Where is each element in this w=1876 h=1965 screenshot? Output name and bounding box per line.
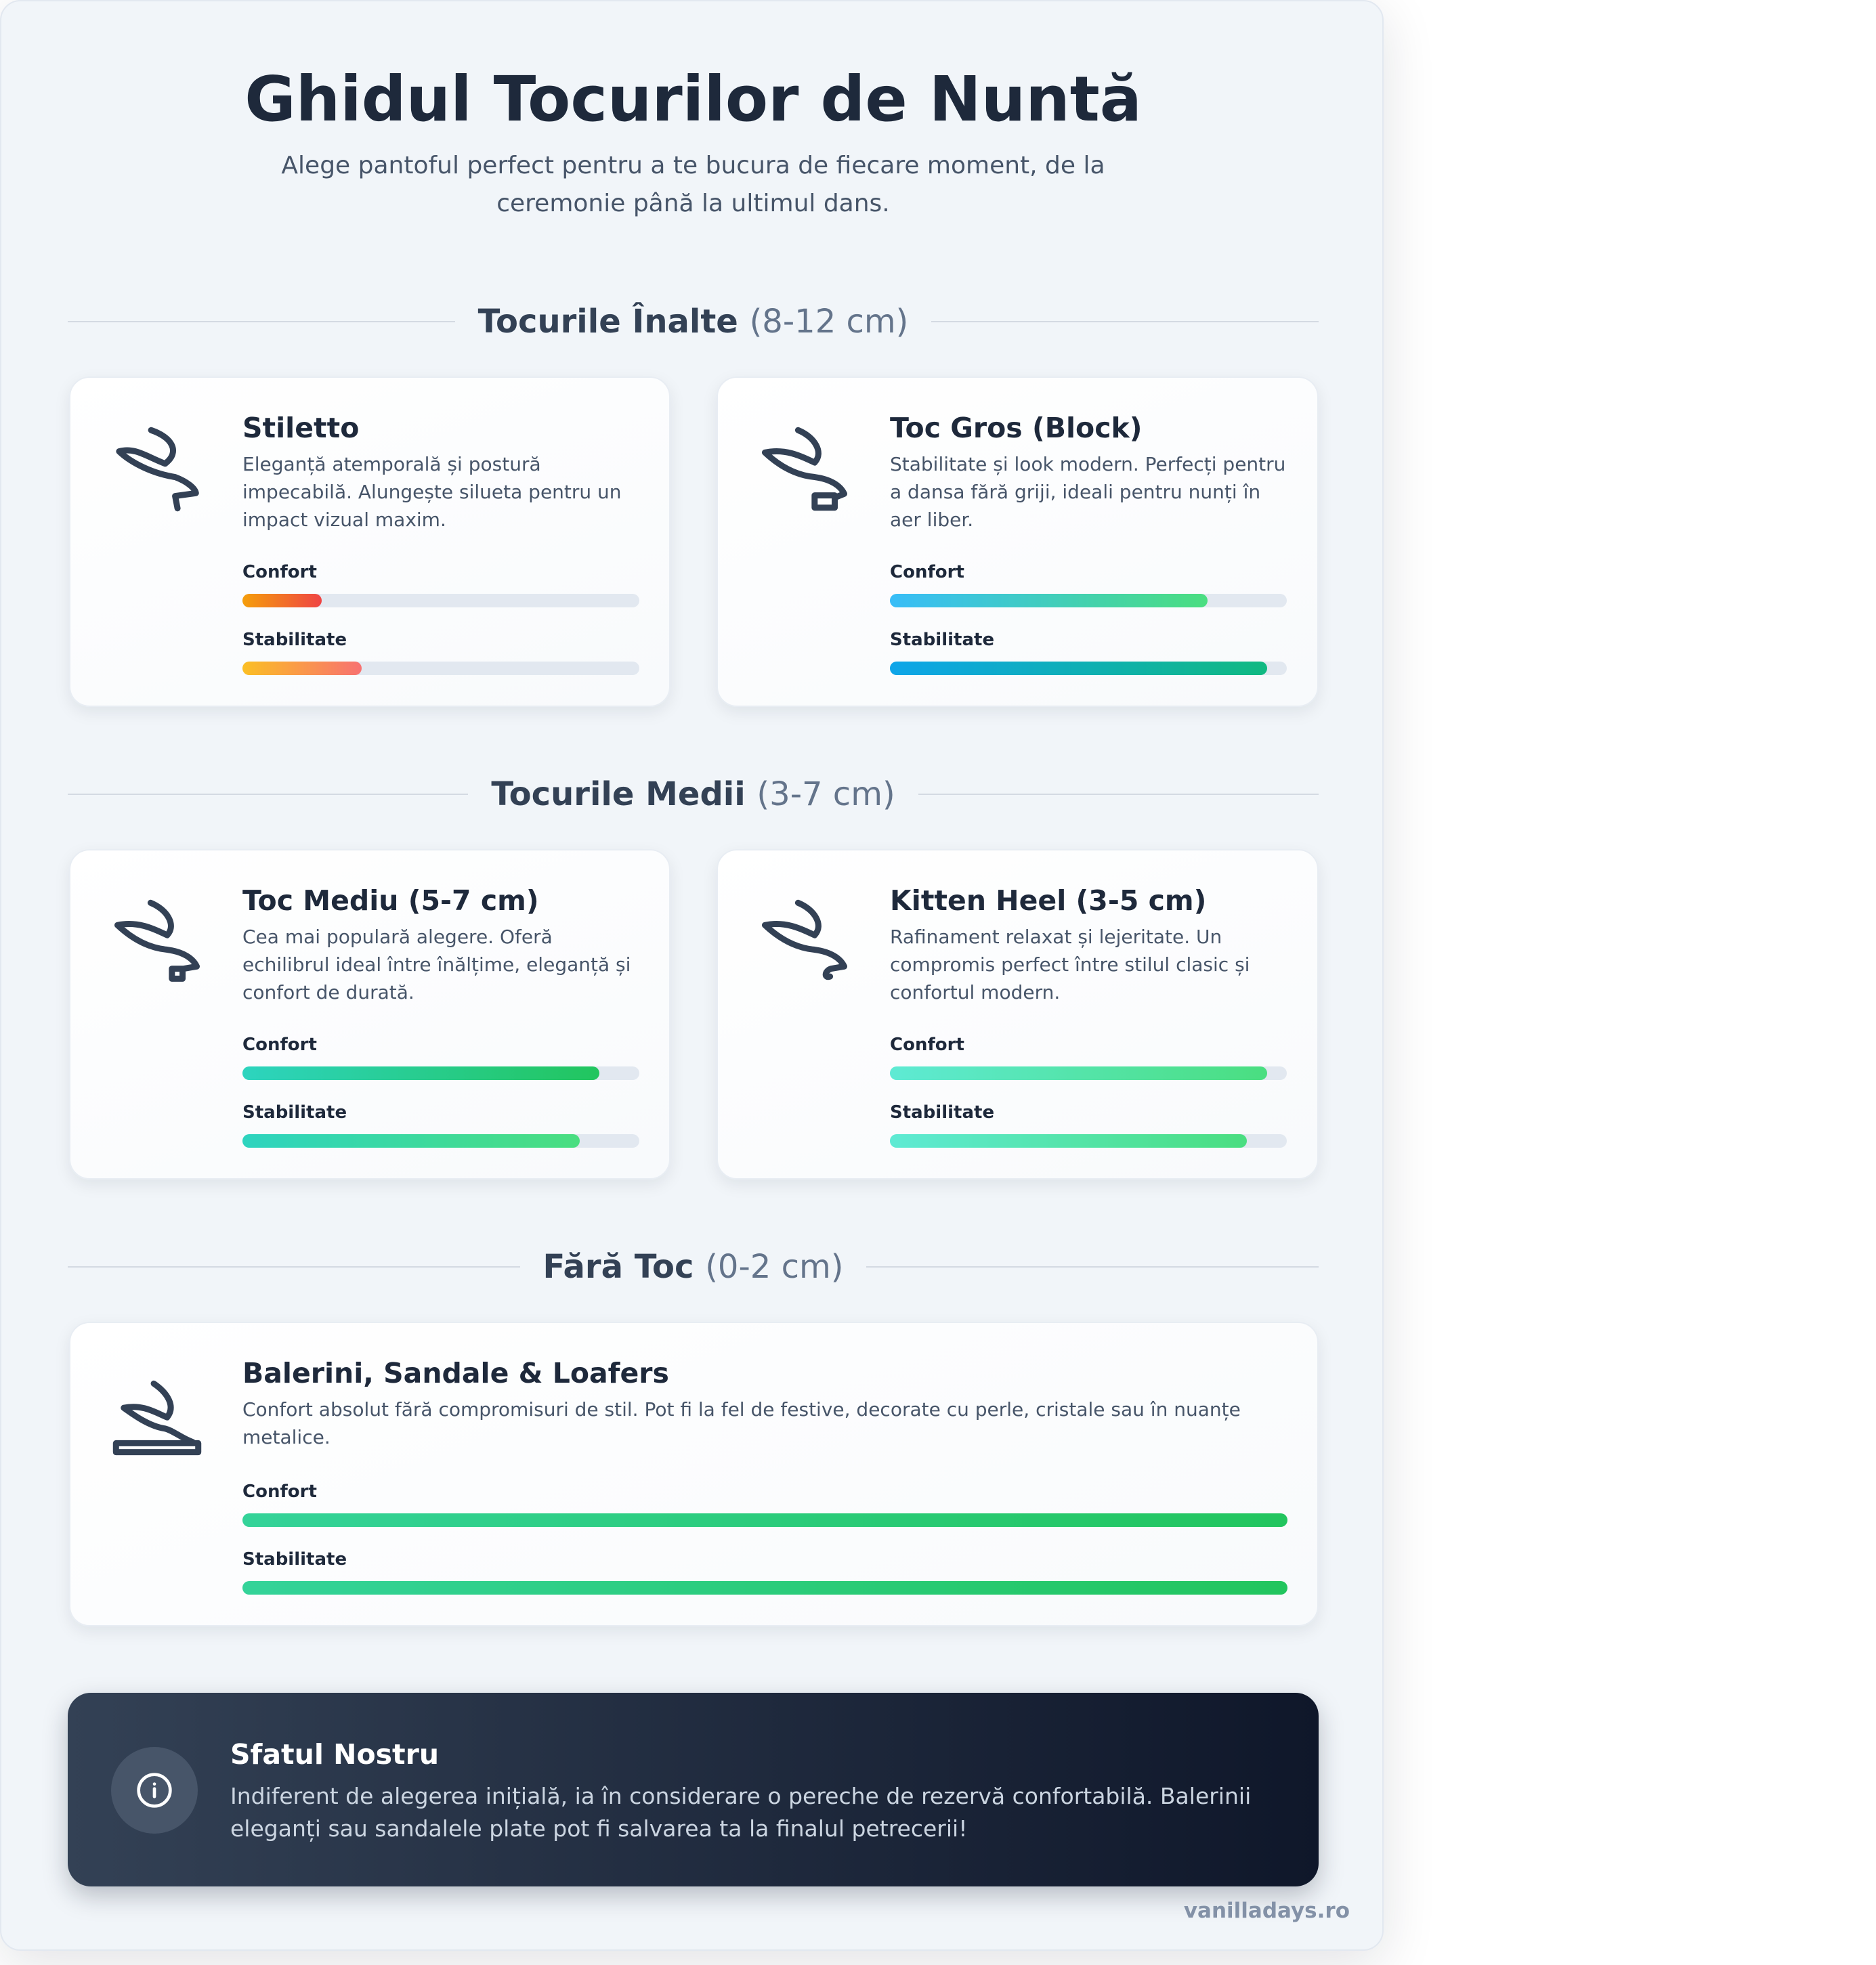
icon: info: [111, 1747, 198, 1834]
page container: [0, 0, 1384, 1951]
section heading: high heels: Tocurile Înalte (8-12 cm): [478, 303, 908, 341]
label confort: Confort: [890, 562, 964, 582]
section heading: flats: Fără Toc (0-2 cm): [543, 1248, 843, 1286]
description: Rafinament relaxat și lejeritate. Un: [890, 926, 1222, 948]
label stabilitate: Stabilitate: [242, 1549, 347, 1570]
description: aer liber.: [890, 509, 973, 531]
label confort: Confort: [890, 1035, 964, 1055]
bar stabilitate: [890, 662, 1287, 675]
bar confort: [242, 1066, 639, 1080]
card: block heel: [717, 376, 1319, 707]
description: confortul modern.: [890, 981, 1060, 1003]
description: [242, 453, 622, 531]
description: impact vizual maxim.: [242, 509, 446, 531]
icon: medium heel: [114, 899, 200, 982]
label stabilitate: Stabilitate: [242, 630, 347, 650]
bar confort: [242, 1513, 1287, 1527]
callout: tip: [68, 1693, 1319, 1886]
subtitle: [281, 152, 1105, 217]
card: kitten heel: [717, 849, 1319, 1180]
description: confort de durată.: [242, 981, 414, 1003]
description: [242, 1398, 1241, 1448]
bar confort: [242, 594, 639, 607]
tip title: Sfatul Nostru: [230, 1738, 439, 1771]
card title: Stiletto: [242, 412, 359, 444]
bar stabilitate: [890, 1134, 1287, 1148]
bar stabilitate: [242, 1134, 639, 1148]
bar confort: [890, 594, 1287, 607]
bar confort: [890, 1066, 1287, 1080]
tip text: [230, 1783, 1251, 1842]
section heading: medium heels: Tocurile Medii (3-7 cm): [491, 775, 895, 813]
card: flats: [69, 1322, 1319, 1626]
card: stiletto: [69, 376, 670, 707]
description: compromis perfect între stilul clasic și: [890, 953, 1250, 976]
card title: Kitten Heel (3-5 cm): [890, 884, 1206, 917]
tip text: eleganți sau sandalele plate pot fi salvarea ta la finalul petrecerii!: [230, 1815, 967, 1842]
description: a dansa fără griji, ideali pentru nunți în: [890, 481, 1260, 503]
description: Stabilitate și look modern. Perfecți pentru: [890, 453, 1285, 475]
description: impecabilă. Alungește silueta pentru un: [242, 481, 622, 503]
footer brand: vanilladays.ro: [1184, 1899, 1350, 1923]
label confort: Confort: [242, 562, 317, 582]
description: Eleganță atemporală și postură: [242, 453, 541, 475]
icon: block heel: [762, 427, 847, 511]
bar stabilitate: [242, 1581, 1287, 1595]
description: [890, 926, 1250, 1003]
title: Ghidul Tocurilor de Nuntă: [244, 63, 1142, 135]
label stabilitate: Stabilitate: [890, 1102, 994, 1123]
subtitle: Alege pantoful perfect pentru a te bucura de fiecare moment, de la: [281, 152, 1105, 179]
bar stabilitate: [242, 662, 639, 675]
card title: Toc Gros (Block): [890, 412, 1143, 444]
label confort: Confort: [242, 1482, 317, 1502]
description: echilibrul ideal între înălțime, eleganță și: [242, 953, 631, 976]
card title: Toc Mediu (5-7 cm): [242, 884, 539, 917]
description: Confort absolut fără compromisuri de stil. Pot fi la fel de festive, decorate cu perle, cristale sau în nuanțe: [242, 1398, 1241, 1421]
card title: Balerini, Sandale & Loafers: [242, 1357, 669, 1389]
description: Cea mai populară alegere. Oferă: [242, 926, 553, 948]
tip text: Indiferent de alegerea inițială, ia în considerare o pereche de rezervă confortabilă. Balerinii: [230, 1783, 1251, 1809]
description: [242, 926, 631, 1003]
description: [890, 453, 1285, 531]
description: metalice.: [242, 1426, 331, 1448]
subtitle: ceremonie până la ultimul dans.: [496, 190, 890, 217]
icon: flat shoe: [112, 1380, 202, 1456]
label stabilitate: Stabilitate: [890, 630, 994, 650]
label confort: Confort: [242, 1035, 317, 1055]
card: medium heel: [69, 849, 670, 1180]
icon: kitten heel: [762, 899, 847, 980]
label stabilitate: Stabilitate: [242, 1102, 347, 1123]
icon: stiletto: [116, 427, 199, 512]
